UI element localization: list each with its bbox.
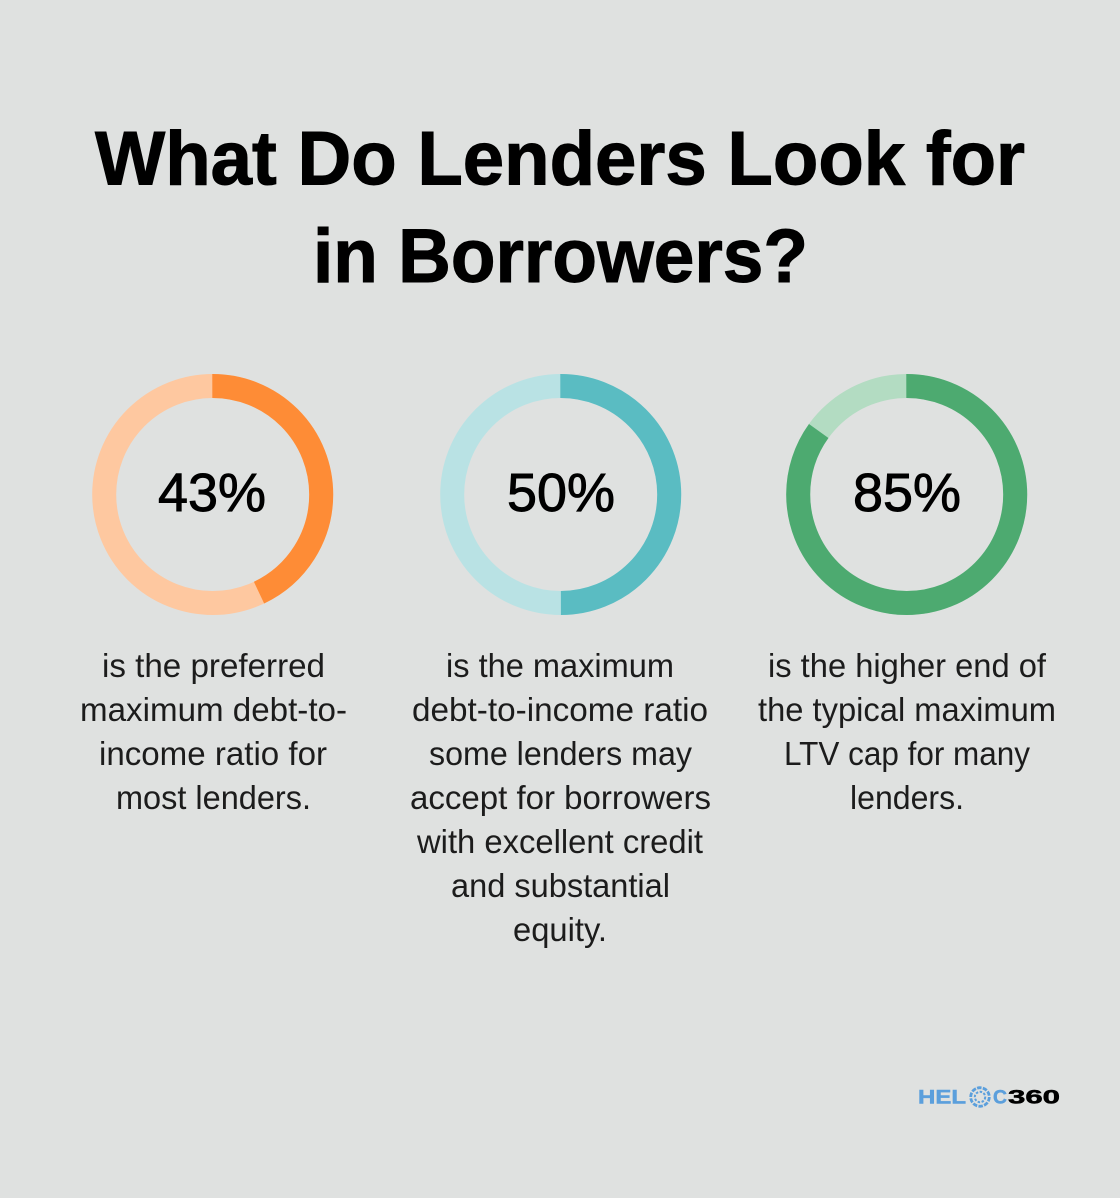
description: 50%: with excellent credit <box>416 823 703 860</box>
description: 50%: equity. <box>513 911 607 948</box>
description: 43%: maximum debt-to- <box>80 691 347 728</box>
icon: logo swirl <box>971 1088 989 1106</box>
description: 43%: income ratio for <box>99 735 327 772</box>
description: 50%: some lenders may <box>429 735 692 772</box>
donut chart: 43%: 43% <box>158 463 266 523</box>
panel: 50% statistic <box>410 386 711 948</box>
description: 50%: debt-to-income ratio <box>412 691 708 728</box>
description: 85%: lenders. <box>850 779 964 816</box>
description: 85%: is the higher end of <box>768 647 1047 684</box>
description: 50%: is the maximum <box>446 647 674 684</box>
logo: HELOC360 <box>918 1088 1060 1108</box>
description: 85%: LTV cap for many <box>784 735 1030 772</box>
panel: 85% statistic <box>758 386 1056 816</box>
logo: HELOC360: HEL <box>918 1088 966 1108</box>
description: 43%: is the preferred <box>102 647 325 684</box>
description: 50% <box>410 647 711 948</box>
title: in Borrowers? <box>313 214 808 299</box>
title: What Do Lenders Look for <box>95 116 1025 202</box>
donut chart: 85% <box>798 386 1015 603</box>
logo: HELOC360: C <box>993 1088 1007 1108</box>
logo: HELOC360: 360 <box>1008 1088 1060 1108</box>
donut chart: 50% <box>452 386 669 603</box>
description: 85% <box>758 647 1056 816</box>
donut chart: 85%: 85% <box>853 463 961 523</box>
description: 85%: the typical maximum <box>758 691 1056 728</box>
description: 50%: accept for borrowers <box>410 779 711 816</box>
title <box>95 116 1025 299</box>
donut chart: 43% <box>104 386 321 603</box>
description: 43% <box>80 647 347 816</box>
panel: 43% statistic <box>80 386 347 816</box>
donut chart: 50%: 50% <box>507 463 615 523</box>
description: 43%: most lenders. <box>116 779 311 816</box>
description: 50%: and substantial <box>451 867 670 904</box>
